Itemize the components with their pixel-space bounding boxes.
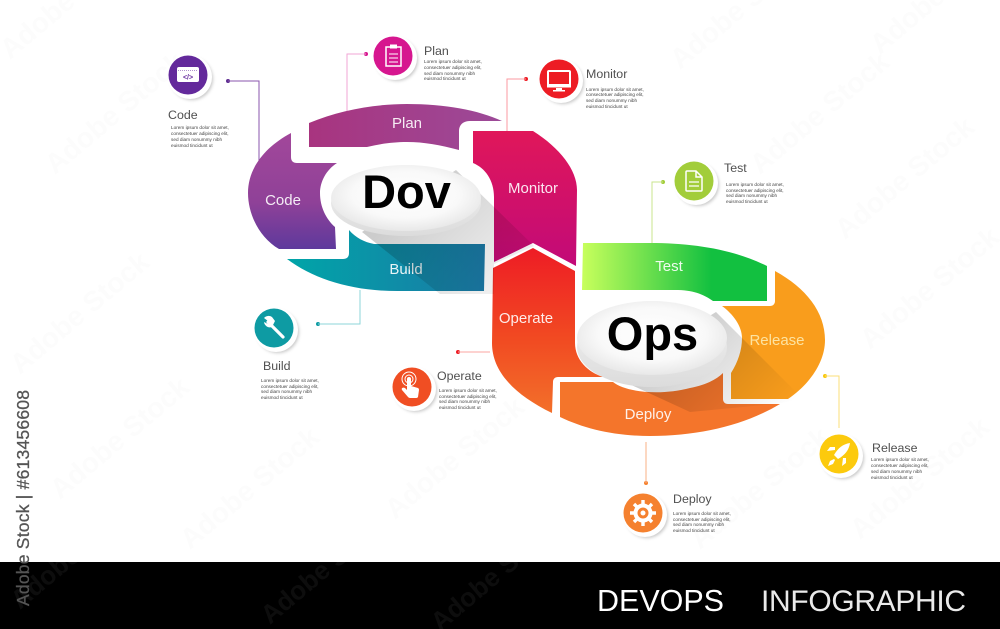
callout: build [254, 308, 319, 400]
segment: plan [309, 104, 502, 150]
segment: release: Release [749, 332, 805, 349]
stock watermarks: Adobe Stock [4, 246, 155, 380]
diagram: Ops loop segments [492, 243, 825, 436]
icon: touch hand [392, 367, 437, 412]
description: monitor: Lorem ipsum dolor sit amet, [586, 87, 644, 92]
segment: release [722, 271, 825, 399]
description: code: consectetuer adipiscing elit, [171, 131, 229, 136]
connector: code [226, 79, 259, 175]
description: monitor: euismod tincidunt ut [586, 104, 628, 109]
segment: test: Test [655, 258, 684, 275]
stock watermarks: Adobe Stock [39, 46, 190, 180]
footer bar: Adobe Stock [5, 489, 146, 615]
heading: build: Build [263, 359, 291, 373]
connector: plan [347, 52, 368, 118]
segment: code: Code [265, 192, 301, 209]
description: monitor: sed diam nonummy nibh [586, 98, 637, 103]
segment: monitor: Monitor [508, 180, 558, 197]
segment: deploy [560, 373, 780, 436]
description: operate: Lorem ipsum dolor sit amet, [439, 388, 497, 393]
stock id, vertical: Adobe Stock | #613456608 [13, 390, 33, 606]
long shadow: Dev ellipse [362, 170, 534, 294]
connector: build [316, 290, 360, 326]
description: build: sed diam nonummy nibh [261, 389, 312, 394]
segment: deploy: Deploy [625, 406, 672, 423]
segment: test [582, 243, 767, 301]
callout: operate [392, 367, 497, 412]
description: plan: sed diam nonummy nibh [424, 71, 475, 76]
description: code: euismod tincidunt ut [171, 143, 213, 148]
description: release: consectetuer adipiscing elit, [871, 463, 929, 468]
description: deploy: consectetuer adipiscing elit, [673, 517, 731, 522]
icon: document [674, 161, 719, 206]
callout: deploy [623, 492, 731, 538]
description: test: euismod tincidunt ut [726, 199, 768, 204]
icon: monitor [539, 59, 584, 104]
segment: build [287, 230, 485, 291]
callout: monitor [539, 59, 644, 109]
description: plan: euismod tincidunt ut [424, 76, 466, 81]
description: release: euismod tincidunt ut [871, 475, 913, 480]
description: test: consectetuer adipiscing elit, [726, 188, 784, 193]
stock watermarks: Adobe Stock [829, 111, 980, 245]
description: code: Lorem ipsum dolor sit amet, [171, 125, 229, 130]
description: deploy: Lorem ipsum dolor sit amet, [673, 511, 731, 516]
icon: code window: </> [183, 74, 193, 82]
footer bar [0, 489, 1000, 629]
icon: wrench [254, 308, 299, 353]
stock watermarks: Adobe Stock [684, 421, 835, 555]
heading: deploy: Deploy [673, 492, 712, 506]
description: deploy: euismod tincidunt ut [673, 528, 715, 533]
connector: operate [456, 350, 490, 354]
segment: plan: Plan [392, 115, 422, 132]
long shadow: Ops ellipse [612, 312, 803, 412]
icon: clipboard [373, 36, 418, 81]
footer bar: Adobe Stock [255, 504, 396, 629]
callout: release [819, 434, 929, 480]
heading: test: Test [724, 161, 747, 175]
segment: code [248, 133, 337, 249]
icon: gear [623, 493, 668, 538]
description: build: Lorem ipsum dolor sit amet, [261, 378, 319, 383]
segment: monitor [473, 131, 577, 266]
description: code: sed diam nonummy nibh [171, 137, 222, 142]
stock watermarks: Adobe Stock [44, 371, 195, 505]
Ops badge [577, 301, 727, 387]
Dov label: Dov [362, 165, 451, 218]
description: release: sed diam nonummy nibh [871, 469, 922, 474]
Dov badge [331, 165, 481, 236]
callout: test [674, 161, 784, 206]
connector: monitor [507, 77, 528, 145]
diagram: Dev loop segments [248, 104, 577, 291]
description: plan: consectetuer adipiscing elit, [424, 65, 482, 70]
description: operate: euismod tincidunt ut [439, 405, 481, 410]
connector: release [823, 374, 839, 428]
heading: release: Release [872, 441, 918, 455]
segment: operate [492, 248, 603, 413]
heading: plan: Plan [424, 44, 449, 58]
stock watermarks: Adobe Stock [844, 411, 995, 545]
description: monitor: consectetuer adipiscing elit, [586, 92, 644, 97]
stock watermarks: Adobe Stock [744, 46, 895, 180]
description: build: consectetuer adipiscing elit, [261, 384, 319, 389]
description: test: Lorem ipsum dolor sit amet, [726, 182, 784, 187]
callout: code [168, 55, 229, 148]
description: build: euismod tincidunt ut [261, 395, 303, 400]
heading: operate: Operate [437, 369, 482, 383]
icon: rocket [819, 434, 864, 479]
description: deploy: sed diam nonummy nibh [673, 522, 724, 527]
Ops label: Ops [607, 307, 698, 360]
footer title: INFOGRAPHIC: INFOGRAPHIC [761, 585, 966, 618]
stock watermarks: Adobe Stock [379, 391, 530, 525]
connector: test [652, 180, 665, 243]
heading: code: Code [168, 108, 198, 122]
description: release: Lorem ipsum dolor sit amet, [871, 457, 929, 462]
description: test: sed diam nonummy nibh [726, 193, 777, 198]
description: operate: consectetuer adipiscing elit, [439, 394, 497, 399]
segment: operate: Operate [499, 310, 553, 327]
description: plan: Lorem ipsum dolor sit amet, [424, 59, 482, 64]
segment: build: Build [389, 261, 423, 278]
connector: deploy [644, 442, 648, 485]
callout: plan [373, 36, 482, 81]
footer title: DEVOPS: DEVOPS [597, 584, 724, 618]
heading: monitor: Monitor [586, 67, 627, 81]
stock watermarks: Adobe Stock [174, 421, 325, 555]
description: operate: sed diam nonummy nibh [439, 399, 490, 404]
